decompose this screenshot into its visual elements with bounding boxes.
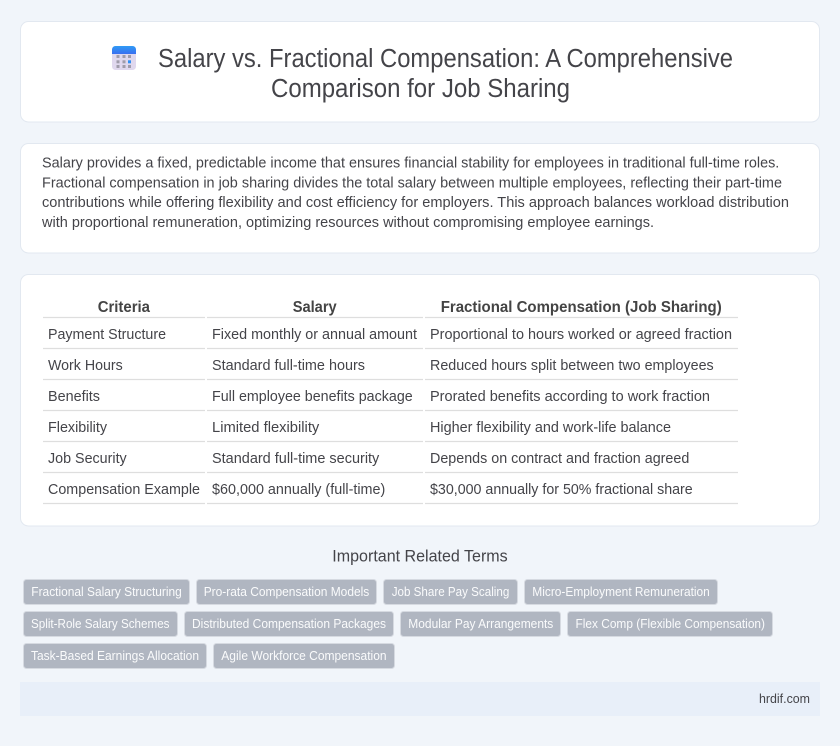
heading: related terms: Important Related Terms xyxy=(332,548,508,566)
title: Salary vs. Fractional Compensation: A Comprehensive xyxy=(158,45,733,73)
panel: comparison table xyxy=(20,274,820,526)
tag: Flex Comp (Flexible Compensation) xyxy=(576,617,765,631)
row: job security xyxy=(48,451,689,467)
table header: Fractional Compensation (Job Sharing) xyxy=(441,299,722,316)
tag xyxy=(524,580,718,604)
tag: Split-Role Salary Schemes xyxy=(31,617,170,631)
row: job security: Standard full-time security xyxy=(212,451,380,467)
footer xyxy=(20,682,820,716)
panel: summary text xyxy=(20,144,820,253)
table header xyxy=(98,299,722,316)
row: payment structure: Proportional to hours worked or agreed fraction xyxy=(430,327,732,343)
row: payment structure: Fixed monthly or annual amount xyxy=(212,327,417,343)
row: work hours xyxy=(48,358,714,374)
panel: related term tags xyxy=(24,580,772,668)
tag: Micro-Employment Remuneration xyxy=(532,585,710,599)
row: compensation example: Compensation Example xyxy=(48,482,200,498)
tag xyxy=(214,644,394,668)
row: job security: Depends on contract and fraction agreed xyxy=(430,451,689,467)
tag xyxy=(184,612,394,636)
table header: Criteria xyxy=(98,299,150,316)
panel: header xyxy=(20,22,820,122)
panel: summary text: Fractional compensation in job sharing divides the total salary between multiple employees, reflecting their part-time xyxy=(42,175,782,191)
row: benefits xyxy=(48,389,710,405)
tag: Job Share Pay Scaling xyxy=(392,585,509,599)
panel: summary text: Salary provides a fixed, predictable income that ensures financial stability for employees in traditional full-time roles. xyxy=(42,156,779,172)
row: work hours: Reduced hours split between two employees xyxy=(430,358,714,374)
tag: Fractional Salary Structuring xyxy=(31,585,182,599)
row: benefits: Benefits xyxy=(48,389,100,405)
row: flexibility: Flexibility xyxy=(48,420,108,436)
title: Comparison for Job Sharing xyxy=(271,75,570,103)
row: flexibility: Higher flexibility and work-life balance xyxy=(430,420,671,436)
row: compensation example: $30,000 annually for 50% fractional share xyxy=(430,482,693,498)
tag: Agile Workforce Compensation xyxy=(221,649,387,663)
row: job security: Job Security xyxy=(48,451,128,467)
row: work hours: Standard full-time hours xyxy=(212,358,365,374)
tag xyxy=(196,580,376,604)
tag xyxy=(568,612,772,636)
tag xyxy=(400,612,560,636)
icon: calendar xyxy=(112,46,136,70)
row: benefits: Prorated benefits according to work fraction xyxy=(430,389,710,405)
title xyxy=(158,45,733,103)
tag: Distributed Compensation Packages xyxy=(192,617,386,631)
tag: Pro-rata Compensation Models xyxy=(204,585,369,599)
tag: Modular Pay Arrangements xyxy=(408,617,553,631)
footer: hrdif.com xyxy=(759,692,810,706)
row: payment structure: Payment Structure xyxy=(48,327,166,343)
row: flexibility: Limited flexibility xyxy=(212,420,320,436)
tag xyxy=(24,612,178,636)
row: flexibility xyxy=(48,420,671,436)
tag xyxy=(24,580,190,604)
row: benefits: Full employee benefits package xyxy=(212,389,413,405)
panel: summary text: with proportional remuneration, optimizing resources without compromising employee earnings. xyxy=(41,215,654,231)
tag xyxy=(24,644,206,668)
row: payment structure xyxy=(48,327,732,343)
tag xyxy=(384,580,518,604)
row: compensation example xyxy=(48,482,693,498)
row: compensation example: $60,000 annually (full-time) xyxy=(212,482,385,498)
tag: Task-Based Earnings Allocation xyxy=(31,649,199,663)
row: work hours: Work Hours xyxy=(48,358,123,374)
table header: Salary xyxy=(293,299,337,316)
panel: summary text: contributions while offering flexibility and cost efficiency for employers. This approach balances workload distribution xyxy=(42,195,789,211)
